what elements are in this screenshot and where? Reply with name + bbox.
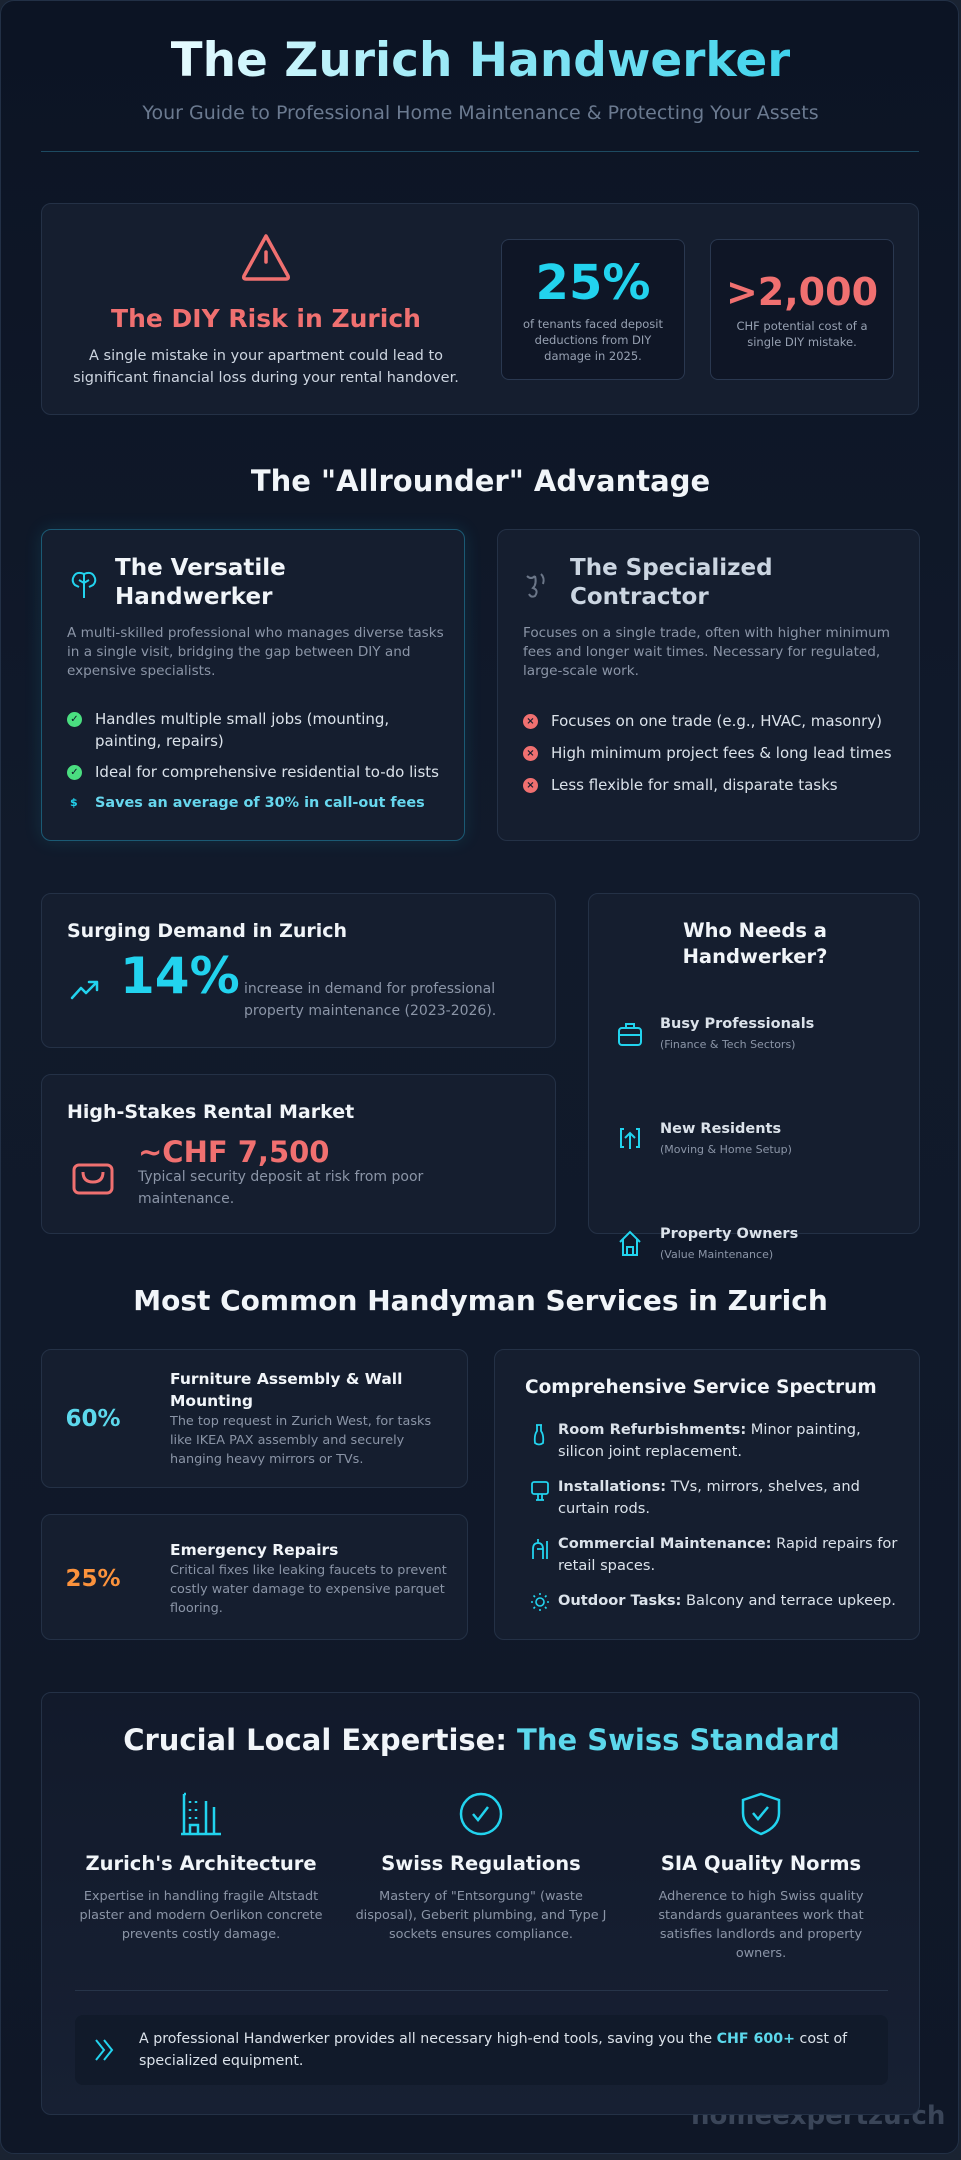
panel: rental market: [41, 1074, 556, 1234]
list: cons: ×: [526, 748, 535, 759]
icon: wallet: [72, 1164, 114, 1194]
list: pros: Handles multiple small jobs (mounting, painting, repairs): [95, 710, 389, 750]
watermark: homeexpertzu.ch: [691, 2101, 945, 2131]
stat: CHF 7,500: ~CHF 7,500: [138, 1135, 330, 1169]
stat: 25%: 25%: [536, 255, 650, 311]
callout: tools: A professional Handwerker provides all necessary high-end tools, saving you the CHF 600+ cost of specialized equipment.: [139, 2031, 847, 2069]
stat: 14%: 14%: [120, 947, 240, 1005]
heading: Comprehensive Service Spectrum: [525, 1377, 877, 1398]
heading: Handwerker: [115, 584, 272, 610]
stat: >2,000: [710, 239, 894, 380]
column: SIA norms: SIA Quality Norms: [661, 1852, 861, 1875]
stat: 25%: [501, 239, 685, 380]
title: The Zurich Handwerker: [171, 33, 790, 88]
item: busy professionals: Busy Professionals: [660, 1016, 814, 1032]
list: cons: ×: [526, 716, 535, 727]
text: Focuses on a single trade, often with higher minimum fees and longer wait times. Necessary for regulated, large-scale work.: [523, 625, 890, 679]
stat: >2,000: >2,000: [726, 270, 878, 314]
list: cons: ×: [526, 780, 535, 791]
list: pros: ✓: [70, 767, 79, 778]
text: Typical security deposit at risk from poor maintenance.: [138, 1169, 423, 1207]
column: regulations: [356, 1792, 606, 1942]
icon: chevrons: [95, 2039, 114, 2061]
list: services: Outdoor Tasks: Balcony and terrace upkeep.: [558, 1592, 896, 1609]
column: architecture: Zurich's Architecture: [85, 1852, 317, 1875]
heading: The Specialized: [570, 555, 773, 581]
item: new residents: [620, 1121, 792, 1156]
callout: tools: [75, 2015, 888, 2085]
heading: common services: Most Common Handyman Services in Zurich: [133, 1284, 828, 1317]
stat: 60%: 60%: [65, 1406, 121, 1432]
heading: [115, 555, 286, 610]
list: pros: Ideal for comprehensive residential to-do lists: [95, 763, 439, 781]
item: new residents: New Residents: [660, 1121, 781, 1137]
list: services: Commercial Maintenance: Rapid repairs for retail spaces.: [558, 1535, 897, 1574]
text: [170, 1370, 431, 1467]
heading: [683, 919, 827, 968]
item: busy professionals: [618, 1016, 814, 1051]
column: architecture: Expertise in handling fragile Altstadt plaster and modern Oerlikon concrete prevents costly damage.: [79, 1889, 323, 1942]
panel: swiss standard: [41, 1692, 920, 2115]
heading: DIY risk: The DIY Risk in Zurich: [111, 304, 421, 333]
icon: warning: [242, 234, 290, 281]
panel: who needs: [588, 893, 920, 1234]
text: Critical fixes like leaking faucets to prevent costly water damage to expensive parquet flooring.: [170, 1563, 447, 1616]
icon: trend up: [70, 980, 98, 1000]
text: DIY description: A single mistake in your apartment could lead to significant financial loss during your rental handover.: [73, 348, 459, 386]
item: property owners: Property Owners: [660, 1226, 798, 1242]
list: cons: High minimum project fees & long lead times: [551, 744, 892, 762]
text: Emergency Repairs: [170, 1541, 338, 1559]
heading: Surging Demand in Zurich: [67, 920, 347, 942]
heading: Contractor: [570, 584, 709, 610]
heading: Allrounder: The "Allrounder" Advantage: [251, 464, 710, 498]
heading: Who Needs a: [683, 919, 827, 942]
stat: 25%: 25%: [65, 1566, 121, 1592]
list: cons: [523, 712, 892, 794]
list: pros: ✓: [70, 714, 79, 725]
item: property owners: [619, 1226, 798, 1261]
panel: DIY risk: [41, 203, 919, 415]
column: architecture: [79, 1792, 323, 1942]
icon: tool: [526, 573, 545, 598]
icon: brain: [72, 572, 96, 598]
panel: service spectrum: [494, 1349, 920, 1640]
heading: [570, 555, 773, 610]
subtitle: Your Guide to Professional Home Maintenance & Protecting Your Assets: [142, 102, 819, 124]
item: busy professionals: (Finance & Tech Sectors): [660, 1038, 795, 1051]
list: cons: Less flexible for small, disparate tasks: [551, 776, 838, 794]
panel: versatile handwerker: [41, 529, 465, 841]
panel: furniture assembly: [41, 1349, 468, 1488]
heading: High-Stakes Rental Market: [67, 1101, 354, 1123]
text: The top request in Zurich West, for tasks like IKEA PAX assembly and securely hanging heavy mirrors or TVs.: [170, 1414, 431, 1467]
column: regulations: Swiss Regulations: [381, 1852, 581, 1875]
panel: specialized contractor: [497, 529, 920, 841]
list: cons: Focuses on one trade (e.g., HVAC, masonry): [551, 712, 882, 730]
list: services: [531, 1421, 898, 1611]
list: services: Room Refurbishments: Minor painting, silicon joint replacement.: [558, 1421, 861, 1460]
text: increase in demand for professional property maintenance (2023-2026).: [244, 981, 496, 1019]
stat: 25%: of tenants faced deposit deductions from DIY damage in 2025.: [523, 317, 663, 363]
item: property owners: (Value Maintenance): [660, 1248, 773, 1261]
column: regulations: Mastery of "Entsorgung" (waste disposal), Geberit plumbing, and Type J sockets ensures compliance.: [356, 1889, 606, 1942]
heading: Crucial Local Expertise: The Swiss Standard: [123, 1723, 840, 1757]
heading: The Versatile: [115, 555, 286, 581]
list: pros: Saves an average of 30% in call-out fees: [95, 795, 425, 811]
list: pros: $: [70, 796, 78, 809]
stat: >2,000: CHF potential cost of a single DIY mistake.: [736, 319, 868, 349]
column: SIA norms: [658, 1792, 864, 1961]
text: Furniture Assembly & Wall Mounting: [170, 1370, 402, 1410]
text: A multi-skilled professional who manages diverse tasks in a single visit, bridging the gap between DIY and expensive specialists.: [67, 625, 444, 679]
list: pros: [67, 710, 439, 811]
item: new residents: (Moving & Home Setup): [660, 1143, 792, 1156]
column: SIA norms: Adherence to high Swiss quality standards guarantees work that satisfies landlords and property owners.: [658, 1889, 864, 1961]
heading: Handwerker?: [683, 945, 827, 968]
list: services: Installations: TVs, mirrors, shelves, and curtain rods.: [558, 1478, 860, 1517]
panel: surging demand: [41, 893, 556, 1048]
panel: emergency repairs: [41, 1514, 468, 1640]
